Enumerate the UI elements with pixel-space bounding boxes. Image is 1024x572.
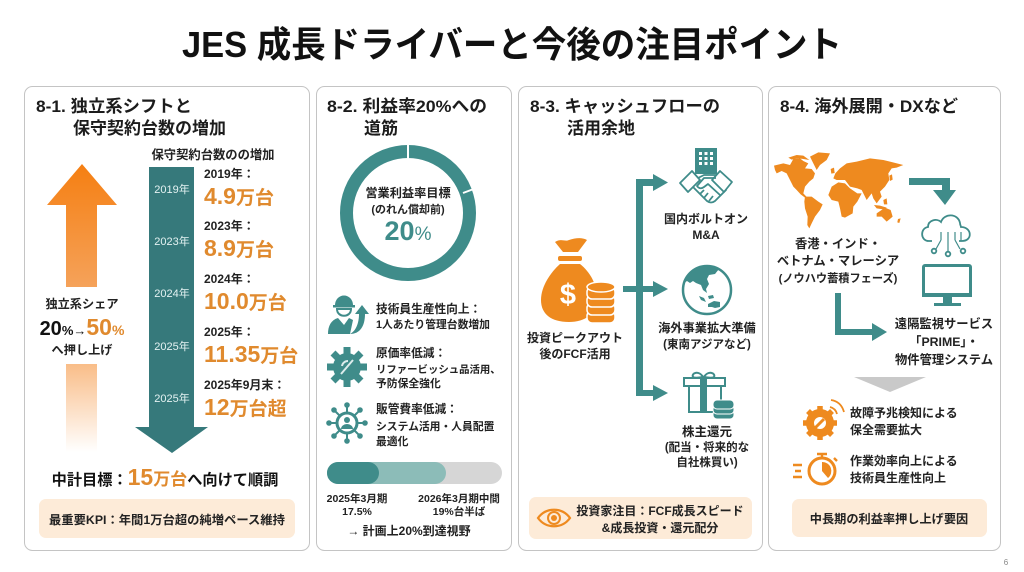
item: productivity [376, 302, 490, 331]
shareholder label: (配当・将来的な [665, 440, 749, 454]
icon: people network [326, 402, 368, 444]
shareholder label: 株主還元 [682, 424, 732, 439]
yearly contract values: 2025年9月末： [204, 377, 285, 392]
title: JES 成長ドライバーと今後の注目ポイント [182, 24, 842, 65]
mid-term target: 中計目標：15万台へ向けて順調 [52, 464, 278, 490]
heading 8-1: 保守契約台数の増加 [73, 118, 226, 138]
item: cost ratio: 予防保全強化 [376, 376, 441, 390]
branching arrows [623, 174, 668, 401]
PRIME text: 遠隔監視サービス [895, 316, 993, 331]
icon: worker with arrow [328, 296, 369, 334]
PRIME text: 「PRIME」・ [909, 335, 979, 349]
yearly contract values: 2024年： [204, 271, 255, 286]
item: work efficiency: 作業効率向上による [850, 453, 958, 468]
panel: 8-3 cash flow [518, 86, 762, 550]
overseas label [658, 320, 756, 351]
progress labels: 2025年3月期 [327, 492, 387, 505]
yearly contract values: 4.9万台 [204, 183, 274, 209]
PRIME text [895, 316, 993, 367]
independent share text [40, 296, 125, 357]
teal down arrow with years: 2023年 [154, 234, 190, 248]
item: SG&A ratio [376, 402, 495, 448]
item: work efficiency [850, 453, 958, 485]
item: cost ratio: 原価率低減： [376, 346, 446, 360]
shareholder label: 自社株買い) [676, 455, 738, 469]
yearly contract values [204, 166, 298, 420]
panel: 8-4 overseas and DX [768, 86, 1000, 550]
icon: money bag with coins [541, 238, 615, 323]
panel: 8-1 independent shift [24, 86, 310, 550]
KPI callout: 最重要KPI：年間1万台超の純増ペース維持 [49, 512, 285, 527]
PRIME text: 物件管理システム [895, 352, 993, 367]
item: work efficiency: 技術員生産性向上 [850, 470, 946, 485]
overseas regions text [777, 236, 899, 285]
item: predictive maintenance: 保全需要拡大 [850, 422, 922, 437]
icon: cloud data [922, 215, 970, 256]
heading 8-3 [530, 97, 720, 138]
arrow: L-shaped to PRIME [835, 293, 887, 341]
overseas regions text: (ノウハウ蓄積フェーズ) [779, 271, 898, 285]
callout: profit drivers: 中長期の利益率押し上げ要因 [810, 511, 968, 526]
icon: money bag with coins: $ [560, 279, 576, 311]
icon: gear with signal [803, 400, 844, 440]
independent share text: へ押し上げ [52, 342, 113, 357]
source text: 投資ピークアウト [527, 330, 623, 345]
item: SG&A ratio: システム活用・人員配置 [376, 419, 495, 433]
teal down arrow with years [135, 167, 208, 453]
progress labels: 2026年3月期中間 [418, 492, 500, 505]
icon: gift with coins [684, 373, 734, 419]
KPI callout [39, 499, 295, 538]
item: productivity: 技術員生産性向上： [376, 302, 481, 316]
investor callout [529, 497, 752, 539]
orange up arrow [47, 164, 117, 287]
teal down arrow with years: 2024年 [154, 286, 190, 300]
fading arrow tail [66, 364, 97, 452]
yearly contract values: 10.0万台 [204, 288, 287, 314]
source text [527, 330, 623, 361]
donut chart [346, 143, 479, 274]
item: cost ratio: リファービッシュ品活用、 [376, 363, 501, 376]
yearly contract values: 2023年： [204, 218, 255, 233]
heading 8-2: 8-2. 利益率20%への [327, 97, 487, 116]
heading 8-3: 活用余地 [567, 119, 635, 138]
M&A label: M&A [692, 228, 720, 242]
heading 8-1: 8-1. 独立系シフトと [36, 97, 192, 116]
arrow: map to cloud [909, 178, 956, 205]
item: SG&A ratio: 販管費率低減： [376, 402, 458, 416]
icon: globe [683, 266, 731, 314]
heading 8-3: 8-3. キャッシュフローの [530, 97, 720, 116]
teal down arrow with years: 2025年 [154, 339, 190, 353]
heading 8-4: 8-4. 海外展開・DXなど [780, 97, 958, 116]
M&A label [664, 211, 748, 242]
donut chart: 20% [385, 216, 432, 246]
icon: eye [538, 510, 570, 526]
icon: stopwatch [793, 454, 837, 484]
teal down arrow with years: 2019年 [154, 182, 190, 196]
yearly contract values: 8.9万台 [204, 235, 274, 261]
overseas label: (東南アジアなど) [663, 337, 751, 351]
page number: 6 [1004, 558, 1009, 567]
progress labels: 19%台半ば [433, 505, 486, 518]
item: predictive maintenance: 故障予兆検知による [850, 405, 958, 420]
donut chart: 営業利益率目標 [365, 185, 451, 200]
teal down arrow with years: 2025年 [154, 391, 190, 405]
item: predictive maintenance [850, 405, 958, 437]
progress labels: → 計画上20%到達視野 [347, 523, 471, 538]
world map [774, 152, 903, 228]
yearly contract values: 11.35万台 [204, 341, 298, 367]
callout: profit drivers [792, 499, 987, 537]
heading 8-2: 道筋 [364, 119, 398, 138]
independent share text: 20%→50% [40, 314, 125, 340]
source text: 後のFCF活用 [539, 346, 611, 361]
icon: monitor [922, 266, 972, 306]
heading 8-1 [36, 97, 226, 138]
progress bar [327, 462, 502, 484]
progress labels [327, 492, 500, 538]
grey down triangle [854, 377, 926, 392]
overseas label: 海外事業拡大準備 [658, 320, 756, 335]
investor callout: &成長投資・還元配分 [602, 520, 718, 535]
item: SG&A ratio: 最適化 [376, 434, 409, 448]
shareholder label [665, 424, 749, 469]
panel: 8-2 margin path [316, 86, 512, 550]
item: productivity: 1人あたり管理台数増加 [376, 317, 490, 331]
overseas regions text: ベトナム・マレーシア [777, 254, 899, 268]
yearly contract values: 2025年： [204, 324, 255, 339]
contract growth subheading: 保守契約台数のの増加 [152, 147, 274, 162]
yearly contract values: 2019年： [204, 166, 255, 181]
overseas regions text: 香港・インド・ [795, 236, 881, 251]
progress labels: 17.5% [342, 506, 373, 518]
icon: building handshake [680, 148, 732, 202]
independent share text: 独立系シェア [45, 296, 119, 311]
donut chart: (のれん償却前) [371, 202, 445, 216]
yearly contract values: 12万台超 [204, 394, 287, 420]
investor callout: 投資家注目：FCF成長スピード [576, 503, 744, 518]
M&A label: 国内ボルトオン [664, 211, 748, 226]
item: cost ratio [376, 346, 501, 390]
icon: gear [327, 347, 367, 387]
heading 8-2 [327, 97, 487, 138]
